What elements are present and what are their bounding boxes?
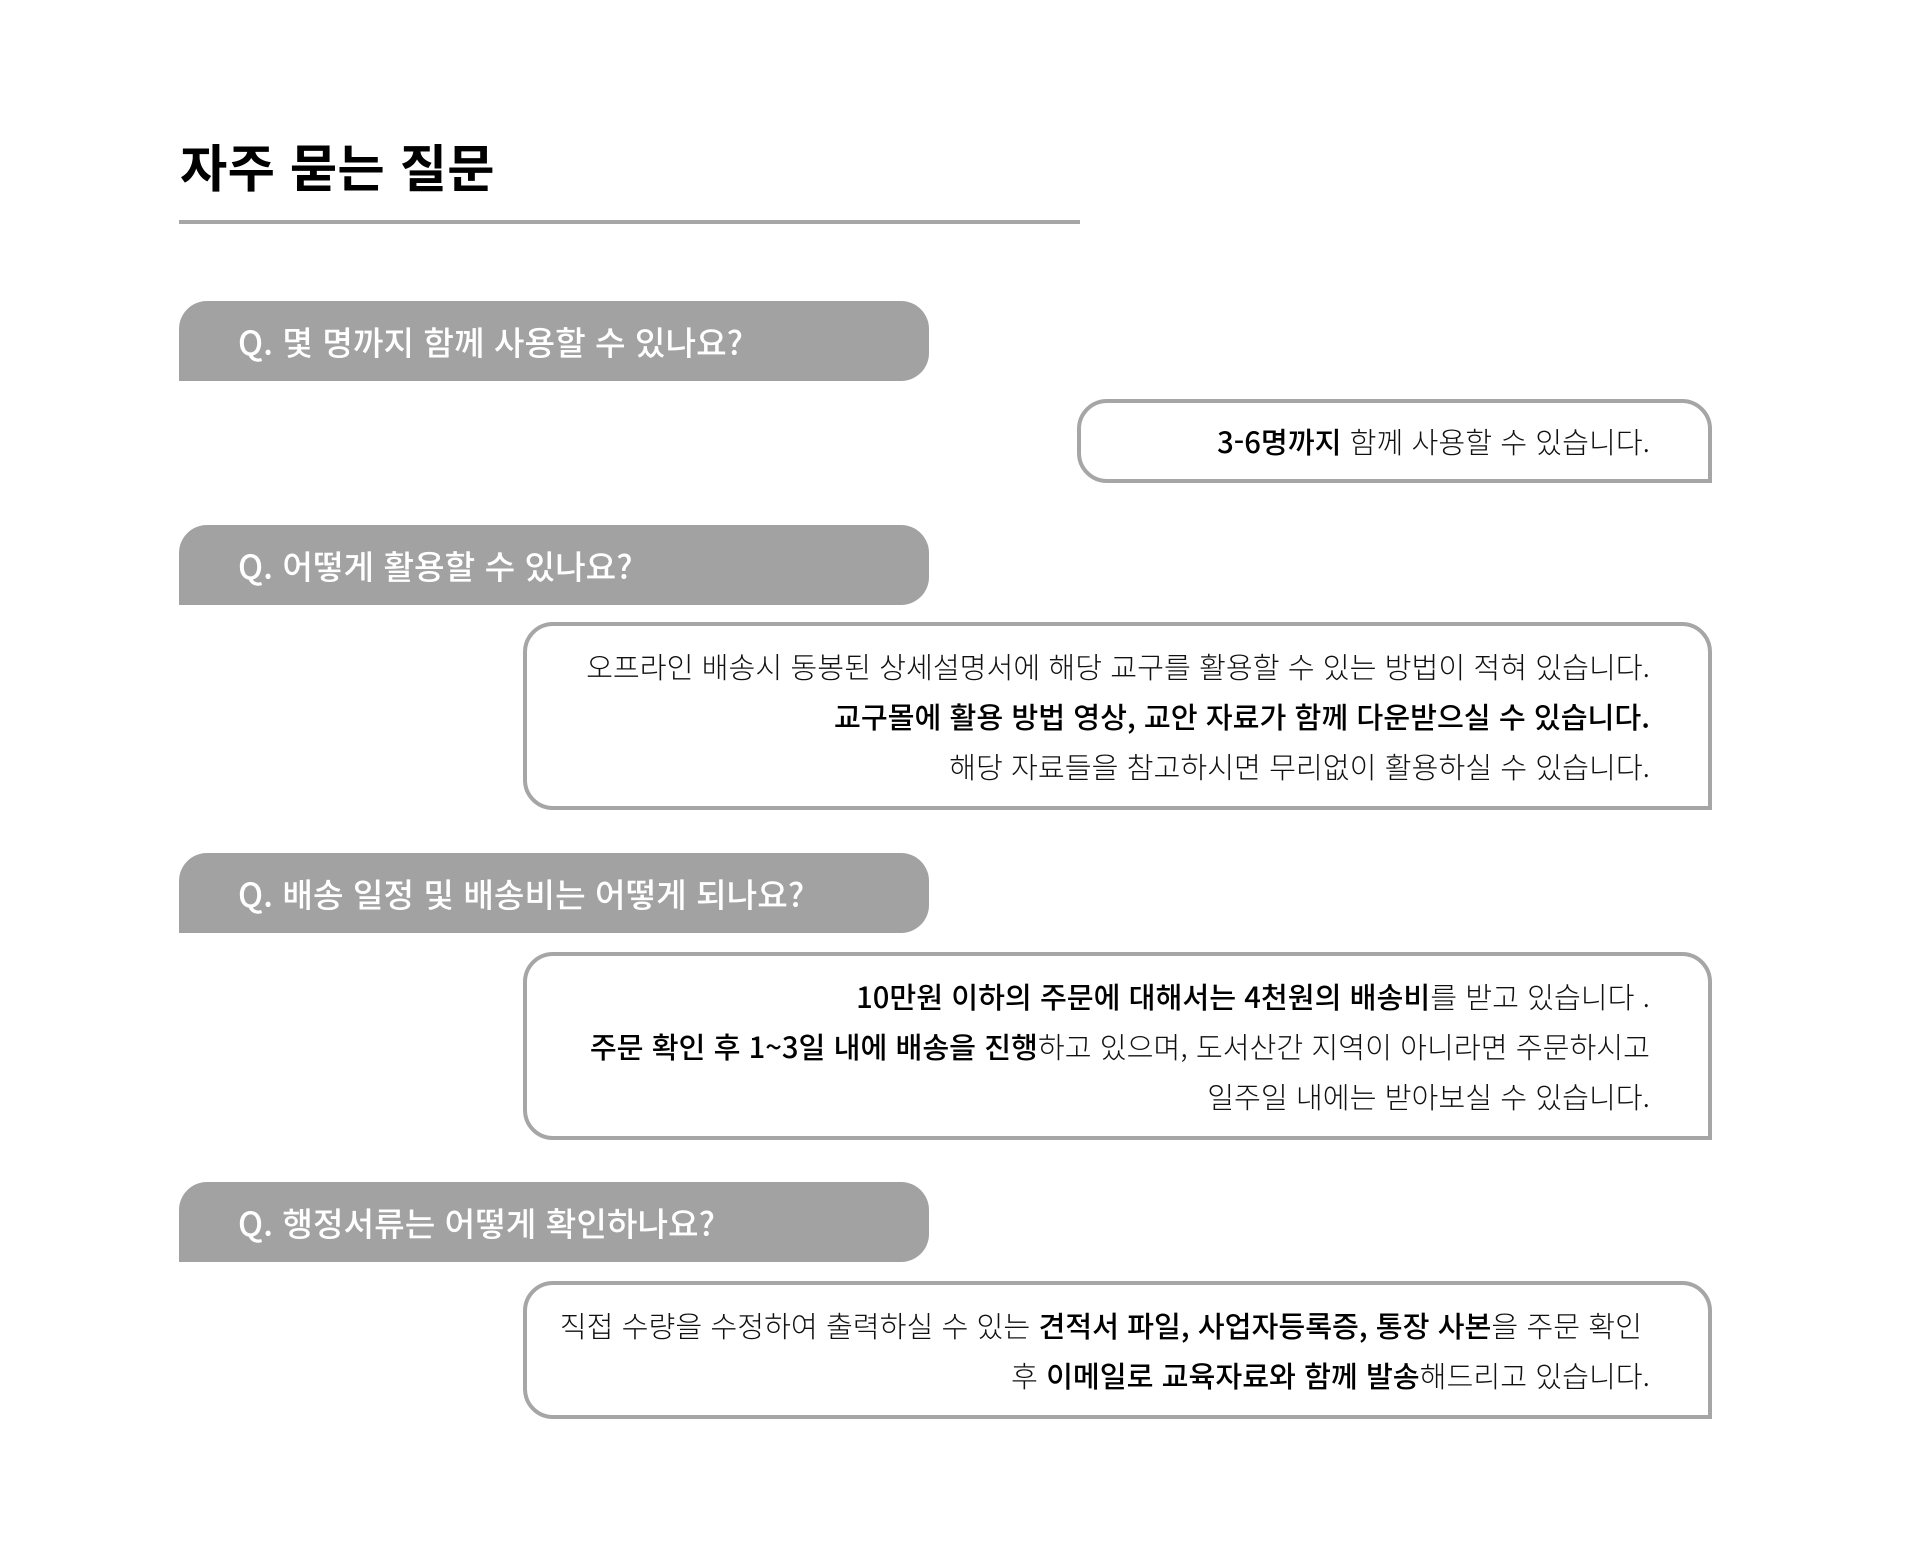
- answer 3 line 1: 10만원 이하의 주문에 대해서는 4천원의 배송비를 받고 있습니다 .: [856, 975, 1650, 1017]
- answer 1: [1077, 399, 1712, 483]
- answer 1 text: 3-6명까지 함께 사용할 수 있습니다.: [1217, 420, 1650, 462]
- question 3: Q. 배송 일정 및 배송비는 어떻게 되나요?: [238, 868, 804, 917]
- question 3: [179, 853, 929, 933]
- answer 3: [523, 952, 1712, 1140]
- question 1: [179, 301, 929, 381]
- question 4: [179, 1182, 929, 1262]
- question 2: [179, 525, 929, 605]
- answer 3 line 2: 주문 확인 후 1~3일 내에 배송을 진행하고 있으며, 도서산간 지역이 아니라면 주문하시고: [590, 1025, 1650, 1067]
- answer 3 line 3: 일주일 내에는 받아보실 수 있습니다.: [1207, 1075, 1650, 1117]
- question 4: Q. 행정서류는 어떻게 확인하나요?: [238, 1197, 715, 1246]
- answer 2: [523, 622, 1712, 810]
- question 2: Q. 어떻게 활용할 수 있나요?: [238, 540, 633, 589]
- answer 4 line 2: 후 이메일로 교육자료와 함께 발송해드리고 있습니다.: [1011, 1354, 1650, 1396]
- answer 4: [523, 1281, 1712, 1419]
- title: 자주 묻는 질문: [180, 127, 495, 202]
- answer 4 line 1: 직접 수량을 수정하여 출력하실 수 있는 견적서 파일, 사업자등록증, 통장 사본을 주문 확인: [560, 1304, 1642, 1346]
- answer 2 line 1: 오프라인 배송시 동봉된 상세설명서에 해당 교구를 활용할 수 있는 방법이 적혀 있습니다.: [586, 645, 1650, 687]
- answer 2 line 3: 해당 자료들을 참고하시면 무리없이 활용하실 수 있습니다.: [949, 745, 1650, 787]
- answer 2 line 2: 교구몰에 활용 방법 영상, 교안 자료가 함께 다운받으실 수 있습니다.: [834, 695, 1650, 737]
- question 1: Q. 몇 명까지 함께 사용할 수 있나요?: [238, 316, 743, 365]
